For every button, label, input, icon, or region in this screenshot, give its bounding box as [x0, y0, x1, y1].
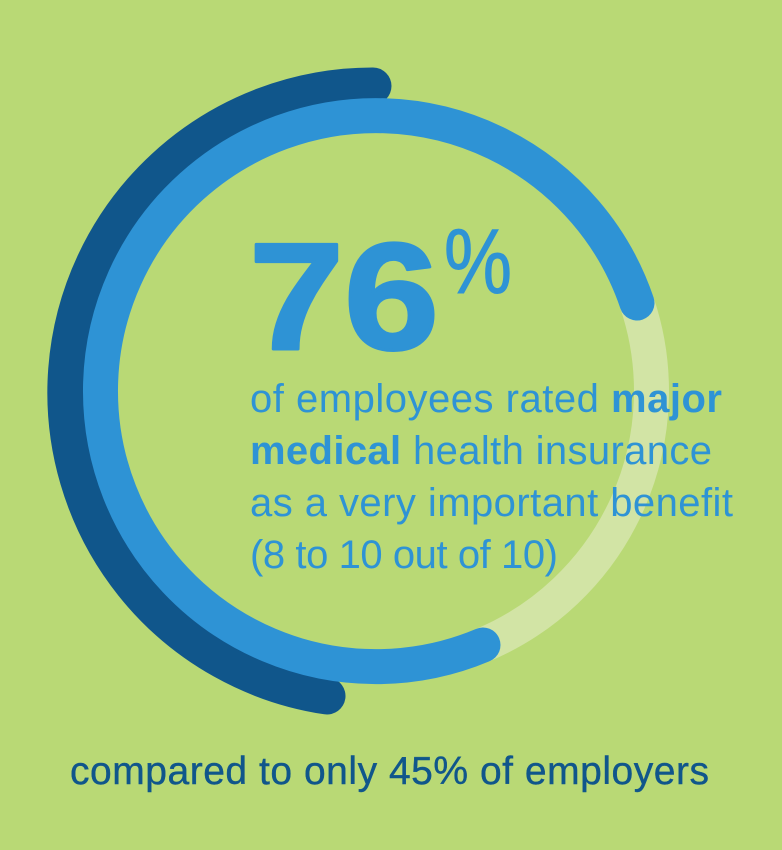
headline number: 76 [249, 212, 439, 382]
line 3: as a very important benefit [250, 481, 733, 525]
ring chart [66, 86, 651, 696]
line 4: (8 to 10 out of 10) [250, 533, 558, 577]
pale remainder arc [483, 303, 651, 645]
dark blue arc: 45% of employers [66, 86, 373, 696]
light blue arc: 76% of employees [100, 116, 637, 667]
percent sign: % [444, 211, 512, 313]
line 2: medical health insurance [250, 429, 712, 473]
line 1: of employees rated major [250, 377, 722, 421]
description text [250, 377, 733, 577]
comparison caption: compared to only 45% of employers [70, 750, 709, 793]
